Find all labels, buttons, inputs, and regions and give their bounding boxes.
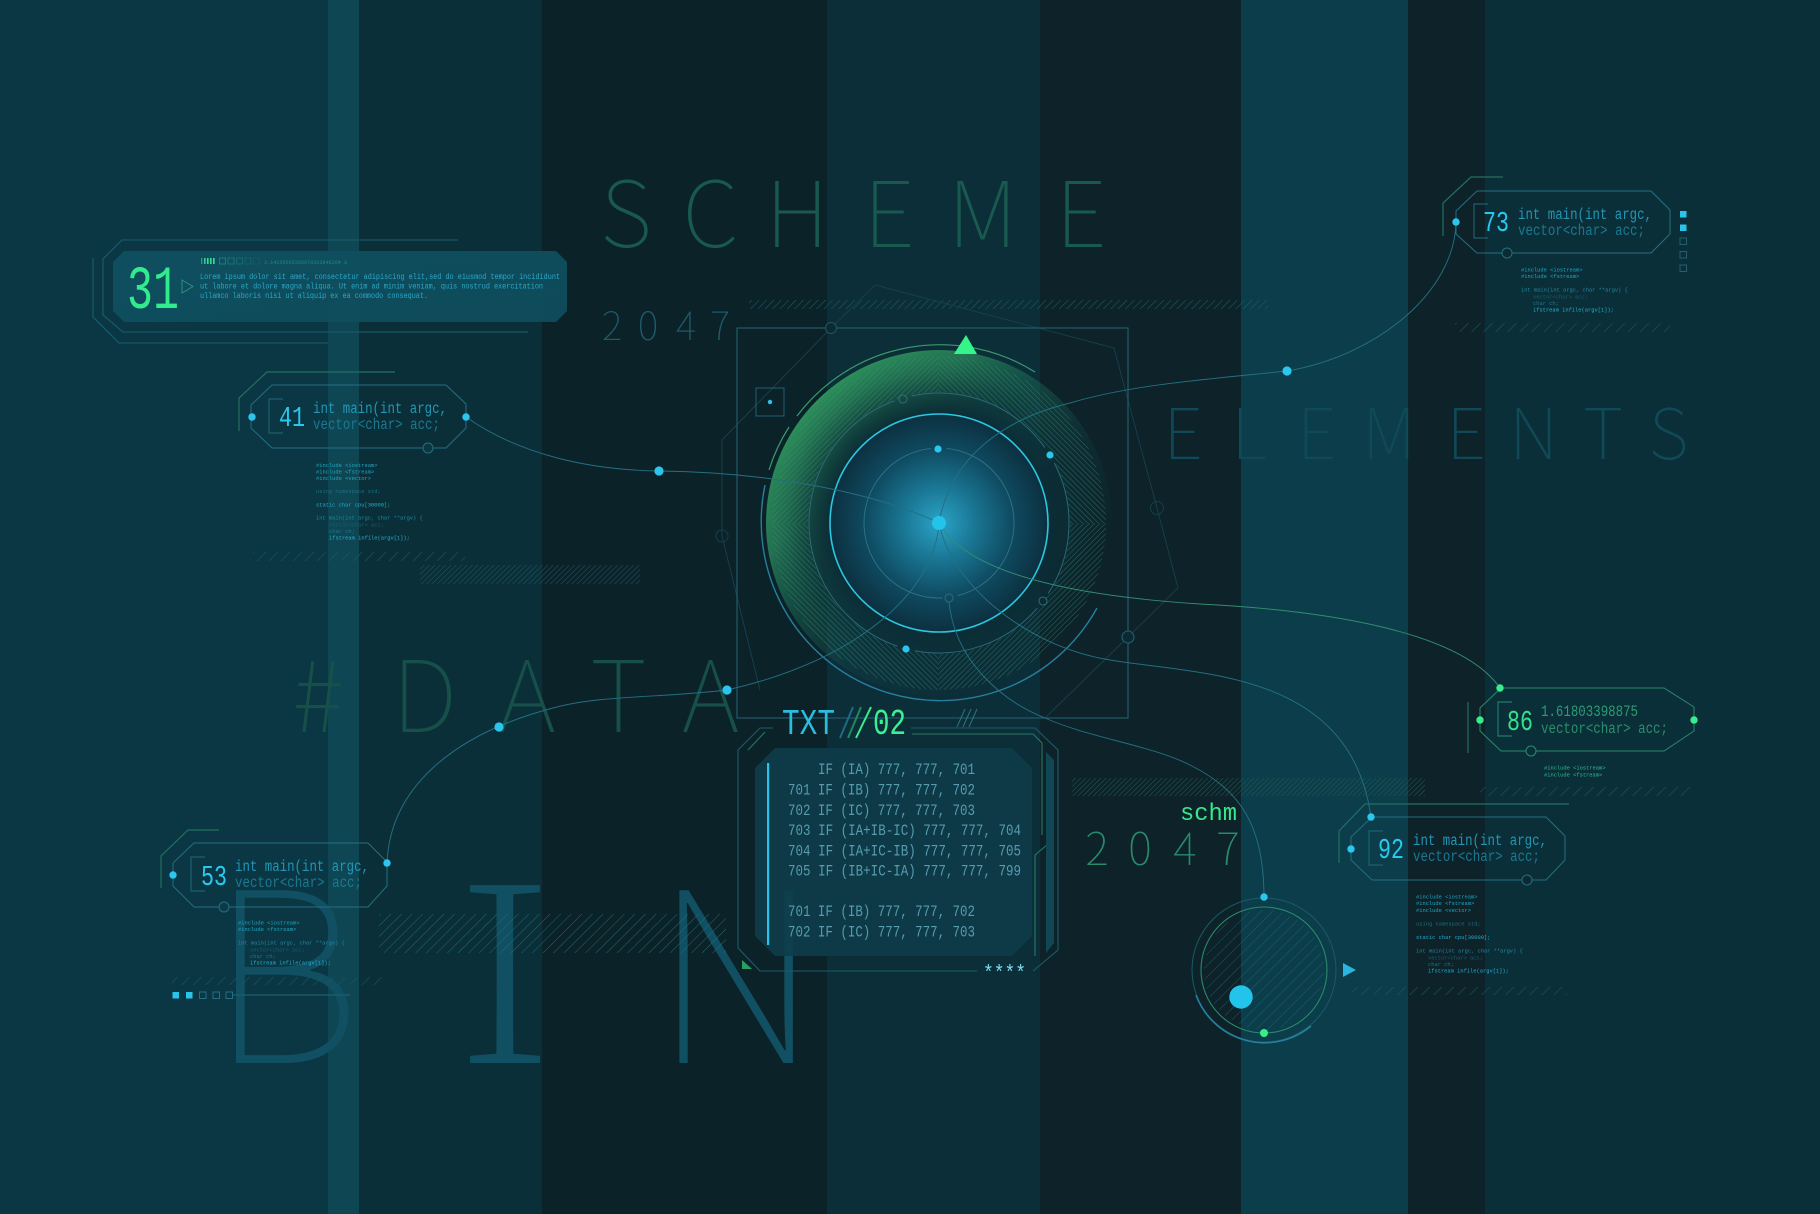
box 41: int main(int argc,	[313, 400, 447, 418]
code snippet under 53: ifstream infile(argv[1]);	[250, 960, 331, 966]
corner triangle	[742, 960, 752, 969]
code snippet under 41: #include <fstream>	[316, 470, 374, 476]
blue outer arc	[761, 485, 1097, 701]
box 73: int main(int argc,	[1518, 206, 1652, 224]
code snippet under 53: #include <iostream>	[238, 920, 299, 926]
level bars	[201, 258, 260, 264]
orbit ring r75	[861, 445, 1017, 601]
code snippet under 73: char ch;	[1533, 301, 1559, 307]
central square frame	[737, 322, 1134, 718]
listing text: 703 IF (IA+IB-IC) 777, 777, 704	[788, 822, 1021, 840]
box 41: vector<char> acc;	[313, 416, 440, 434]
lorem text: ullamco laboris nisi ut aliquip ex ea commodo consequat.	[200, 291, 428, 301]
code snippet under 53: vector<char> acc;	[250, 948, 305, 954]
code snippet under 41: static char cpu[30000];	[316, 502, 390, 508]
listing background	[755, 748, 1032, 956]
big letters: BIN: I	[456, 781, 554, 1134]
green outer arcs	[769, 345, 1035, 470]
listing text: 705 IF (IB+IC-IA) 777, 777, 799	[788, 862, 1021, 880]
lorem text: Lorem ipsum dolor sit amet, consectetur adipiscing elit,sed do eiusmod tempor incididunt	[200, 272, 560, 282]
code snippet under 86: #include <fstream>	[1544, 772, 1602, 778]
big letters: BIN: N	[653, 787, 819, 1132]
code snippet under 41: ifstream infile(argv[1]);	[329, 536, 410, 542]
box 92: int main(int argc,	[1413, 832, 1547, 850]
panel: code listing	[738, 728, 1058, 986]
code snippet under 53	[238, 920, 345, 966]
code snippet under 92: #include <iostream>	[1416, 894, 1477, 900]
code snippet under 41	[316, 463, 423, 542]
heading: TXT//02	[782, 704, 906, 745]
lower right scanner dial	[1192, 893, 1356, 1043]
green pointer triangle	[954, 335, 977, 354]
code snippet under 53: #include <fstream>	[238, 927, 296, 933]
glowing core	[830, 414, 1048, 632]
listing green frame	[748, 732, 1047, 956]
box 86: 1.61803398875	[1541, 703, 1638, 721]
big letters: 2047 upper: 2047	[602, 296, 730, 352]
code snippet under 73: ifstream infile(argv[1]);	[1533, 308, 1614, 314]
code snippet under 41: vector<char> acc;	[329, 522, 384, 528]
dial blue arc	[1196, 995, 1311, 1043]
panel: 31 lorem	[93, 240, 567, 343]
dial rings	[1192, 898, 1336, 1042]
heading: TXT//02: 02	[873, 704, 906, 745]
code snippet under 73	[1521, 268, 1628, 314]
code snippet under 86: #include <iostream>	[1544, 766, 1605, 772]
code snippet under 73: #include <iostream>	[1521, 268, 1582, 274]
box 41	[239, 372, 470, 453]
inner dark shade	[766, 350, 1112, 696]
center dot	[932, 516, 946, 530]
big letters: 2047 lower: 2047	[1085, 813, 1240, 878]
box 73: vector<char> acc;	[1518, 222, 1645, 240]
big letters: #DATA: #DATA	[292, 617, 739, 761]
box 86: 86	[1507, 706, 1533, 739]
faint polygon behind central frame	[716, 285, 1178, 718]
listing frame	[738, 728, 1058, 971]
connector nodes	[494, 366, 1292, 732]
box 53: 53	[201, 861, 227, 894]
listing text: IF (IA) 777, 777, 701	[818, 761, 975, 779]
number 31: 31	[127, 258, 179, 327]
box 92: 92	[1378, 834, 1404, 867]
listing text: 701 IF (IB) 777, 777, 702	[788, 782, 975, 800]
side sliver	[1046, 752, 1054, 953]
code snippet under 92: #include <fstream>	[1416, 901, 1474, 907]
open node markers	[899, 395, 1047, 605]
code snippet under 92: vector<char> acc;	[1428, 956, 1483, 962]
orbit ring r130	[756, 340, 1122, 706]
box 86	[1468, 684, 1698, 756]
small square marker	[756, 388, 784, 416]
box 92	[1339, 804, 1569, 885]
box 41: 41	[279, 402, 305, 435]
code snippet under 86	[1544, 766, 1605, 778]
box 53	[161, 830, 391, 912]
code snippet under 41: char ch;	[329, 529, 355, 535]
orbit ring r27	[912, 496, 966, 550]
label: schm: schm	[1180, 801, 1237, 828]
dial top dot	[1260, 893, 1268, 901]
listing text: 702 IF (IC) 777, 777, 703	[788, 802, 975, 820]
code snippet under 92: ifstream infile(argv[1]);	[1428, 968, 1509, 974]
box 53: vector<char> acc;	[235, 874, 362, 892]
connector curves	[387, 222, 1500, 897]
dial hatch	[1204, 910, 1324, 1030]
dial large dot	[1229, 985, 1253, 1009]
big letters: ELEMENTS: ELEMENTS	[1163, 379, 1688, 480]
box 53: int main(int argc,	[235, 858, 369, 876]
asterisks: ****	[983, 963, 1026, 986]
hatched ring	[772, 356, 1106, 690]
box 86: vector<char> acc;	[1541, 720, 1668, 738]
big letters: BIN: B	[210, 787, 360, 1132]
listing text: 701 IF (IB) 777, 777, 702	[788, 903, 975, 921]
dial play arrow	[1343, 963, 1356, 977]
lorem text	[200, 272, 560, 301]
green crescent disc	[766, 350, 1112, 696]
code snippet under 53: char ch;	[250, 954, 276, 960]
hatch bands	[172, 300, 1693, 995]
code snippet under 73: int main(int argc, char **argv) {	[1521, 288, 1628, 294]
square indicators under 53	[172, 992, 350, 998]
central radar dial	[756, 335, 1122, 706]
code snippet under 92: char ch;	[1428, 962, 1454, 968]
dial green dot	[1260, 1029, 1268, 1037]
box 73: 73	[1483, 207, 1509, 240]
code snippet under 53: int main(int argc, char **argv) {	[238, 940, 345, 946]
code snippet under 41: int main(int argc, char **argv) {	[316, 516, 423, 522]
listing text	[788, 761, 1021, 942]
code snippet under 41: #include <iostream>	[316, 463, 377, 469]
code snippet under 73: vector<char> acc;	[1533, 294, 1588, 300]
code snippet under 41: #include <vector>	[316, 476, 371, 482]
code snippet under 92	[1416, 894, 1523, 974]
big letters: SCHEME: SCHEME	[600, 142, 1107, 274]
code snippet under 92: int main(int argc, char **argv) {	[1416, 948, 1523, 954]
listing text: 704 IF (IA+IC-IB) 777, 777, 705	[788, 842, 1021, 860]
panel outer frames	[93, 240, 528, 343]
cyan ring	[830, 414, 1048, 632]
filled node dots	[902, 445, 1054, 653]
code snippet under 92: static char cpu[30000];	[1416, 935, 1490, 941]
cyan bar	[767, 763, 769, 945]
code snippet under 41: using namespace std;	[316, 489, 381, 495]
panel fill	[113, 251, 567, 322]
code snippet under 73: #include <fstream>	[1521, 274, 1579, 280]
code snippet under 92: #include <vector>	[1416, 908, 1471, 914]
box 92: vector<char> acc;	[1413, 848, 1540, 866]
small slashes	[957, 709, 977, 727]
lorem text: ut labore et dolore magna aliqua. Ut enim ad minim veniam, quis nostrud exercitation	[200, 282, 543, 292]
heading: TXT//02: TXT	[782, 704, 835, 745]
code snippet under 92: using namespace std;	[1416, 922, 1481, 928]
play outline	[182, 280, 193, 293]
box 73	[1443, 177, 1670, 258]
listing text: 702 IF (IC) 777, 777, 703	[788, 924, 975, 942]
pi digits: 3.14159265358979323846264 3	[264, 259, 347, 266]
square indicators right of 73	[1680, 211, 1686, 272]
